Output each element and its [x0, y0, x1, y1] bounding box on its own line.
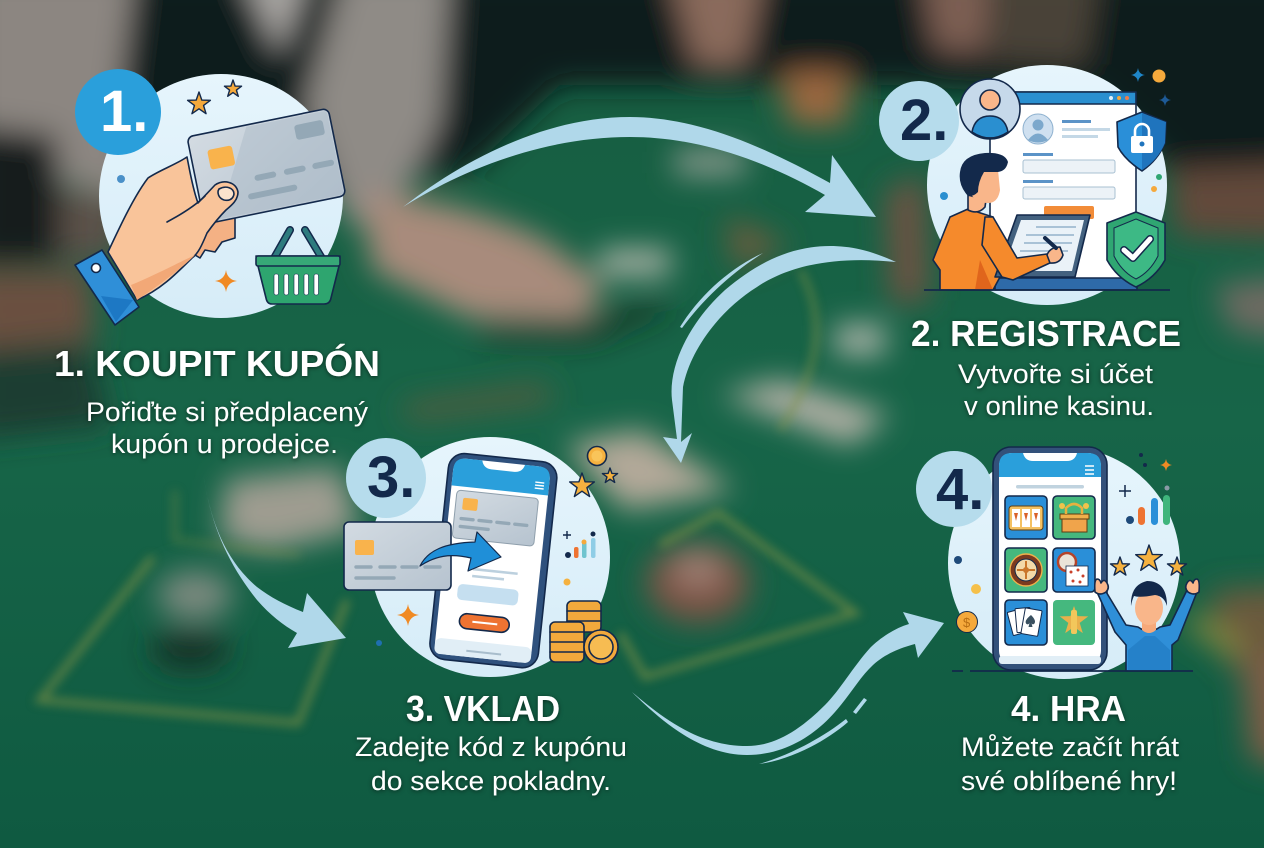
number badge 3 [346, 438, 426, 518]
number badge 2 [879, 81, 959, 161]
number badge 4: 4. [936, 457, 984, 522]
heading: 3. VKLAD [406, 688, 560, 729]
ground line [924, 289, 1170, 291]
icon: cuff [75, 250, 139, 325]
tile: cards [1005, 600, 1047, 645]
text block: své oblíbené hry! [961, 766, 1177, 796]
icon: person at tablet [933, 153, 1090, 290]
tile: trophy star [1053, 600, 1095, 645]
text block: do sekce pokladny. [371, 766, 611, 796]
tile: roulette [1005, 548, 1047, 592]
number badge 1 [75, 69, 161, 155]
icon: decorations [376, 578, 570, 646]
icon: decorations [940, 68, 1171, 200]
ground line [952, 670, 1193, 672]
panel: step 1 buy voucher [54, 69, 380, 459]
text block [86, 397, 369, 459]
text block [958, 359, 1154, 421]
icon: voucher card [344, 522, 451, 590]
heading: 2. REGISTRACE [911, 313, 1181, 354]
icon: basket [256, 230, 340, 304]
icon: check shield [1107, 212, 1165, 287]
disc [927, 65, 1167, 305]
disc [370, 437, 610, 677]
arrow: step 3 to step 4 [632, 612, 944, 764]
arrow: step 1 to step 2 [403, 117, 876, 217]
tile: chips and dice [1053, 548, 1095, 592]
icon: phone [428, 452, 558, 669]
tile: slot machine [1005, 496, 1047, 539]
icon: stars and coin [570, 446, 618, 497]
heading: 1. KOUPIT KUPÓN [54, 342, 380, 384]
icon: hand [108, 157, 238, 300]
icon: stars [117, 80, 242, 292]
icon: decorations top [1139, 453, 1172, 471]
icon: cheering person [1095, 579, 1199, 671]
panel: step 3 deposit [344, 437, 627, 796]
arrow: step 1 to step 3 [203, 473, 346, 648]
number badge 3: 3. [367, 445, 415, 510]
number badge 1: 1. [100, 79, 148, 144]
icon: fingers behind card [190, 215, 235, 258]
disc [948, 447, 1180, 679]
text block [961, 732, 1180, 796]
icon: lock shield [1117, 112, 1166, 171]
tile: treasure [1053, 496, 1095, 539]
window form [990, 92, 1137, 290]
text block: Můžete začít hrát [961, 732, 1180, 762]
panel: step 2 registration [879, 65, 1181, 421]
text block: Zadejte kód z kupónu [355, 732, 627, 762]
number badge 4 [916, 451, 992, 527]
arrow: step 2 to step 3 [663, 246, 896, 463]
icon: coins [550, 601, 618, 664]
heading: 4. HRA [1011, 688, 1126, 729]
panel: step 4 play [916, 447, 1199, 796]
disc [99, 74, 343, 318]
text block: v online kasinu. [964, 391, 1154, 421]
text block [355, 732, 627, 796]
arrow: blue transfer [420, 532, 501, 571]
text block: Vytvořte si účet [958, 359, 1154, 389]
chart: mini bars [563, 531, 596, 558]
icon: decorations left [954, 556, 981, 632]
icon: voucher card [187, 108, 346, 224]
icon: decorations left: $ [963, 615, 971, 630]
icon: stars [1110, 545, 1187, 575]
icon: phone with games [993, 447, 1107, 670]
text block: kupón u prodejce. [111, 429, 338, 459]
number badge 2: 2. [900, 88, 948, 153]
icon: user avatar [960, 79, 1020, 139]
text block: Pořiďte si předplacený [86, 397, 369, 427]
chart: mini bars [1119, 485, 1170, 525]
